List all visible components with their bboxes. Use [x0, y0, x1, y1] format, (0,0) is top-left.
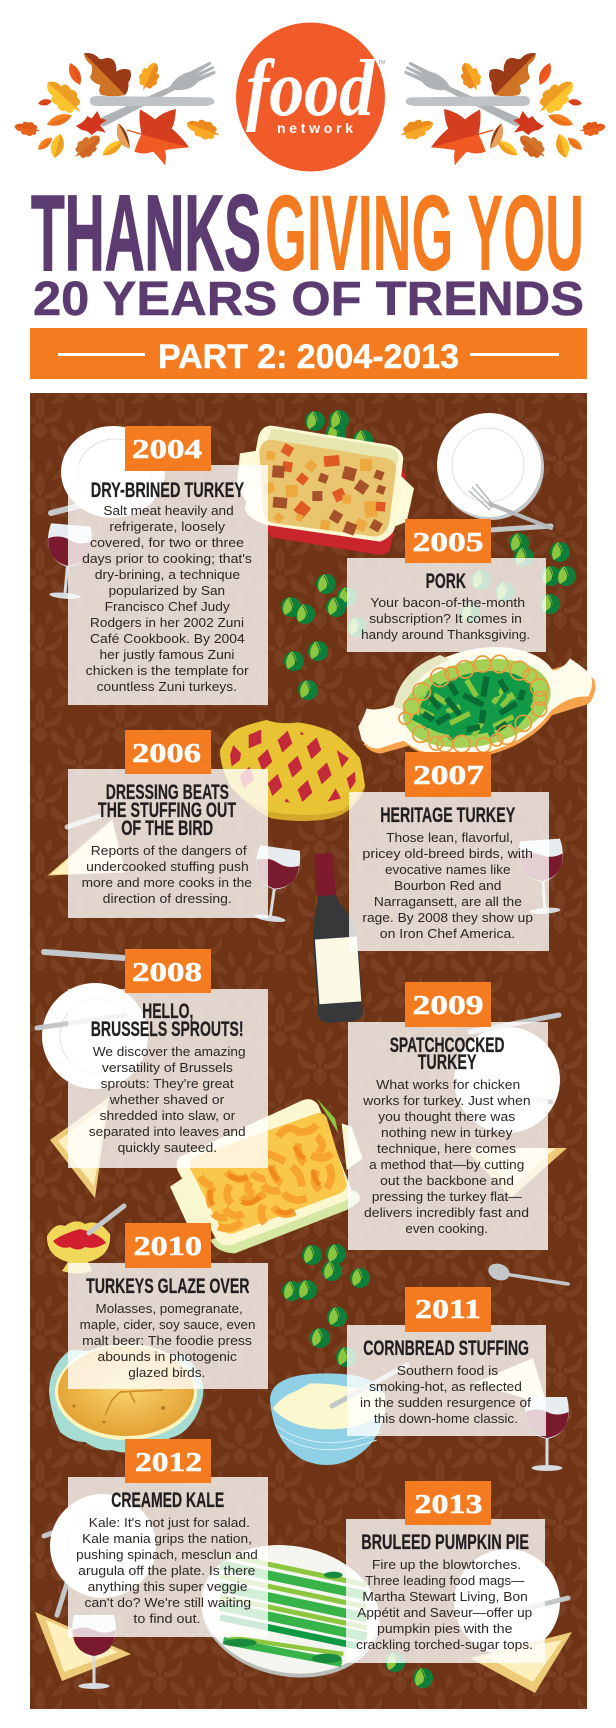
body: 2009: a method that—by cutting [369, 1157, 524, 1172]
year tag: 2008: 2008 [132, 957, 202, 987]
year tag: 2009 [405, 982, 491, 1027]
year tag: 2004 [125, 426, 211, 471]
year tag: 2013: 2013 [414, 1489, 482, 1519]
body: 2011: in the sudden resurgence of [360, 1395, 531, 1410]
body: 2013: Fire up the blowtorches. [372, 1557, 521, 1572]
heading: spatchcocked turkey: TURKEY [418, 1051, 476, 1074]
wine glass: 2012 [72, 1615, 116, 1689]
logo: food network: network [277, 120, 353, 136]
banner: part 2: PART 2: 2004-2013 [158, 338, 459, 376]
napkin: 2012 [35, 1612, 131, 1681]
heading: dressing beats the stuffing: OF THE BIRD [121, 817, 213, 840]
plate and cutlery: 2012 [44, 1494, 156, 1615]
body: 2007 [362, 830, 533, 941]
body: 2004: countless Zuni turkeys. [97, 679, 237, 694]
body: 2009: nothing new in turkey [381, 1125, 513, 1140]
year tag: 2011: 2011 [415, 1294, 481, 1324]
body: 2007: pricey old-breed birds, with [362, 846, 533, 861]
plate and knife: 2004 [51, 426, 165, 518]
body: 2010 [80, 1301, 255, 1380]
body: 2009: What works for chicken [376, 1077, 520, 1092]
body: 2011: this down-home classic. [374, 1411, 518, 1426]
panel: 2009 [348, 982, 548, 1250]
body: 2010: abounds in photogenic [98, 1349, 237, 1364]
body: 2012: arugula off the plate. Is there [78, 1563, 255, 1578]
body: 2007: on Iron Chef America. [380, 926, 515, 941]
body: 2013: Martha Stewart Living, Bon [362, 1589, 528, 1604]
lattice pie [220, 720, 365, 821]
heading: hello brussels sprouts [91, 1000, 244, 1041]
body: 2006 [82, 843, 252, 906]
panel: 2013 [346, 1481, 545, 1663]
year tag: 2007 [405, 752, 491, 797]
body: 2004: Salt meat heavily and [103, 503, 234, 518]
plate and knife: 2008 [37, 983, 148, 1089]
body: 2004: refrigerate, loosely [109, 519, 226, 534]
title: THANKS [31, 172, 261, 293]
body: 2008: sprouts: They're great [101, 1076, 234, 1091]
body: 2008: quickly sauteed. [118, 1140, 217, 1155]
knife: 2006 [67, 816, 100, 827]
year tag: 2007: 2007 [413, 760, 484, 790]
body: 2012: pushing spinach, mesclun and [76, 1547, 258, 1562]
panel: 2011 [347, 1287, 546, 1436]
body: 2012: anything this super veggie [88, 1579, 247, 1594]
body: 2011: smoking-hot, as reflected [369, 1379, 522, 1394]
body: 2007: Narragansett, are all the [374, 894, 522, 909]
sprouts scattered [281, 410, 576, 1688]
body: 2012: to find out. [133, 1611, 200, 1626]
plate and fork: 2005 [437, 413, 551, 530]
body: 2004: covered, for two or three [90, 535, 244, 550]
body: 2012: Kale mania grips the nation, [82, 1531, 252, 1546]
body: 2013: Three leading food mags— [365, 1573, 524, 1588]
body: 2007: Those lean, flavorful, [386, 830, 513, 845]
heading: hello brussels sprouts: BRUSSELS SPROUTS! [91, 1018, 244, 1041]
logo: food network: food [246, 45, 375, 133]
asparagus plate [191, 1531, 390, 1691]
napkin: 2009 [464, 1148, 567, 1198]
napkin: 2013 [470, 1632, 572, 1693]
body: 2010: malt beer: The foodie press [82, 1333, 252, 1348]
heading: heritage turkey: HERITAGE TURKEY [380, 804, 515, 827]
year tag: 2010: 2010 [134, 1231, 202, 1261]
body: 2004: Café Cookbook. By 2004 [90, 631, 245, 646]
green bean dish [358, 630, 595, 777]
body: 2009: you thought there was [378, 1109, 516, 1124]
body: 2005: subscription? It comes in [369, 611, 522, 626]
leaves and cutlery: right [397, 53, 607, 165]
body: 2004: popularized by San [109, 583, 225, 598]
body: 2008: We discover the amazing [93, 1044, 246, 1059]
body: 2007: Bourbon Red and [394, 878, 501, 893]
heading: bruleed pumpkin pie: BRULEED PUMPKIN PIE [361, 1531, 529, 1554]
body: 2004 [82, 503, 252, 694]
body: 2009: works for turkey. Just when [362, 1093, 531, 1108]
casserole: stuffing [237, 426, 414, 555]
body: 2013: crackling torched-sugar tops. [356, 1637, 533, 1652]
wine glass: 2004 [43, 523, 93, 601]
knife: 2008 [44, 952, 124, 958]
year tag: 2012: 2012 [135, 1447, 202, 1477]
body: 2004: her justly famous Zuni [100, 647, 235, 662]
napkin: 2006 [49, 820, 125, 875]
panel: 2008 [68, 949, 268, 1168]
body: 2009: delivers incredibly fast and [364, 1205, 529, 1220]
napkin: 2011 [474, 1358, 547, 1405]
body: 2006: more and more cooks in the [82, 875, 252, 890]
body: 2011: Southern food is [397, 1363, 499, 1378]
body: 2008: separated into leaves and [89, 1124, 246, 1139]
body: 2005: Your bacon-of-the-month [370, 595, 525, 610]
body: 2009: even cooking. [405, 1221, 488, 1236]
panel: timeline background [30, 393, 587, 1709]
body: 2005: handy around Thanksgiving. [361, 627, 530, 642]
panel: 2010 [68, 1223, 268, 1389]
body: 2004: Francisco Chef Judy [105, 599, 230, 614]
body: 2010: Molasses, pomegranate, [96, 1301, 243, 1316]
body: 2013: pumpkin pies with the [377, 1621, 512, 1636]
body: 2010: maple, cider, soy sauce, even [80, 1317, 255, 1332]
year tag: 2005 [405, 519, 491, 563]
body: 2008 [89, 1044, 246, 1155]
body: 2009 [362, 1077, 531, 1236]
panel: 2007 [349, 752, 549, 951]
body: 2006: undercooked stuffing push [86, 859, 249, 874]
body: 2009: pressing the turkey flat— [372, 1189, 522, 1204]
wine glass: 2011 [525, 1397, 569, 1471]
heading: cornbread stuffing: CORNBREAD STUFFING [363, 1337, 529, 1360]
body: 2010: glazed birds. [128, 1365, 205, 1380]
body: 2006: Reports of the dangers of [91, 843, 247, 858]
pumpkin tart [49, 1344, 203, 1452]
body: 2011 [360, 1363, 531, 1426]
wine glass: 2007 [518, 838, 567, 915]
logo: food network: TM [378, 60, 385, 66]
year tag: 2008 [125, 949, 211, 993]
body: 2008: whether shaved or [109, 1092, 225, 1107]
year tag: 2012 [125, 1439, 211, 1483]
body: 2006: direction of dressing. [103, 891, 232, 906]
cranberry bowl [47, 1206, 124, 1274]
body: 2004: dry-brining, a technique [95, 567, 240, 582]
body: 2007: rage. By 2008 they show up [362, 910, 533, 925]
body: 2013: Appétit and Saveur—offer up [357, 1605, 532, 1620]
year tag: 2010 [125, 1223, 211, 1268]
banner: part 2 [30, 328, 587, 379]
spoon: 2010 to 2011 [486, 1261, 568, 1284]
year tag: 2013 [405, 1481, 491, 1525]
panel: 2012 [68, 1439, 268, 1637]
year tag: 2004: 2004 [132, 434, 202, 464]
body: 2013 [356, 1557, 533, 1652]
heading: spatchcocked turkey [390, 1034, 504, 1074]
body: 2007: evocative names like [385, 862, 510, 877]
heading: dressing beats the stuffing [98, 781, 236, 840]
leaves and cutlery: left [13, 53, 223, 165]
body: 2005 [361, 595, 530, 642]
heading: pork: PORK [426, 570, 466, 593]
year tag: 2009: 2009 [412, 990, 484, 1020]
panel: 2005 [347, 519, 546, 652]
year tag: 2006: 2006 [132, 738, 201, 768]
body: 2004: days prior to cooking; that's [82, 551, 252, 566]
panel: 2006 [68, 730, 268, 918]
spoon: mashed potato [332, 1365, 407, 1406]
subtitle: 20 YEARS OF TRENDS [33, 273, 584, 326]
heading: dressing beats the stuffing: DRESSING BEATS [106, 781, 229, 804]
year tag: 2011 [405, 1287, 491, 1332]
plate and knife: 2013 [454, 1549, 568, 1655]
body: 2009: technique, here comes [377, 1141, 517, 1156]
body: 2004: Rodgers in her 2002 Zuni [90, 615, 244, 630]
macaroni casserole [170, 1098, 363, 1253]
panel: 2004 [68, 426, 268, 705]
wine glass: 2006 [248, 845, 302, 924]
mashed potato bowl [270, 1373, 385, 1465]
body: 2012: Kale: It's not just for salad. [89, 1515, 250, 1530]
heading: dry-brined turkey: DRY-BRINED TURKEY [91, 479, 244, 502]
heading: hello brussels sprouts: HELLO, [142, 1000, 193, 1023]
body: 2008: shredded into slaw, or [100, 1108, 236, 1123]
body: 2012 [76, 1515, 258, 1626]
napkin: 2008 [50, 1097, 109, 1198]
heading: spatchcocked turkey: SPATCHCOCKED [390, 1034, 504, 1057]
body: 2009: out the backbone and [380, 1173, 514, 1188]
heading: dressing beats the stuffing: THE STUFFING OUT [98, 799, 236, 822]
heading: creamed kale: CREAMED KALE [111, 1489, 224, 1512]
wine bottle [307, 852, 364, 1023]
body: 2004: chicken is the template for [86, 663, 249, 678]
plate and knife: 2009 [454, 1015, 560, 1133]
year tag: 2005: 2005 [412, 527, 484, 557]
body: 2012: can't do? We're still waiting [84, 1595, 251, 1610]
body: 2008: versatility of Brussels [102, 1060, 233, 1075]
year tag: 2006 [125, 730, 211, 774]
logo: food network [236, 22, 385, 172]
heading: turkeys glaze over: TURKEYS GLAZE OVER [86, 1275, 249, 1298]
